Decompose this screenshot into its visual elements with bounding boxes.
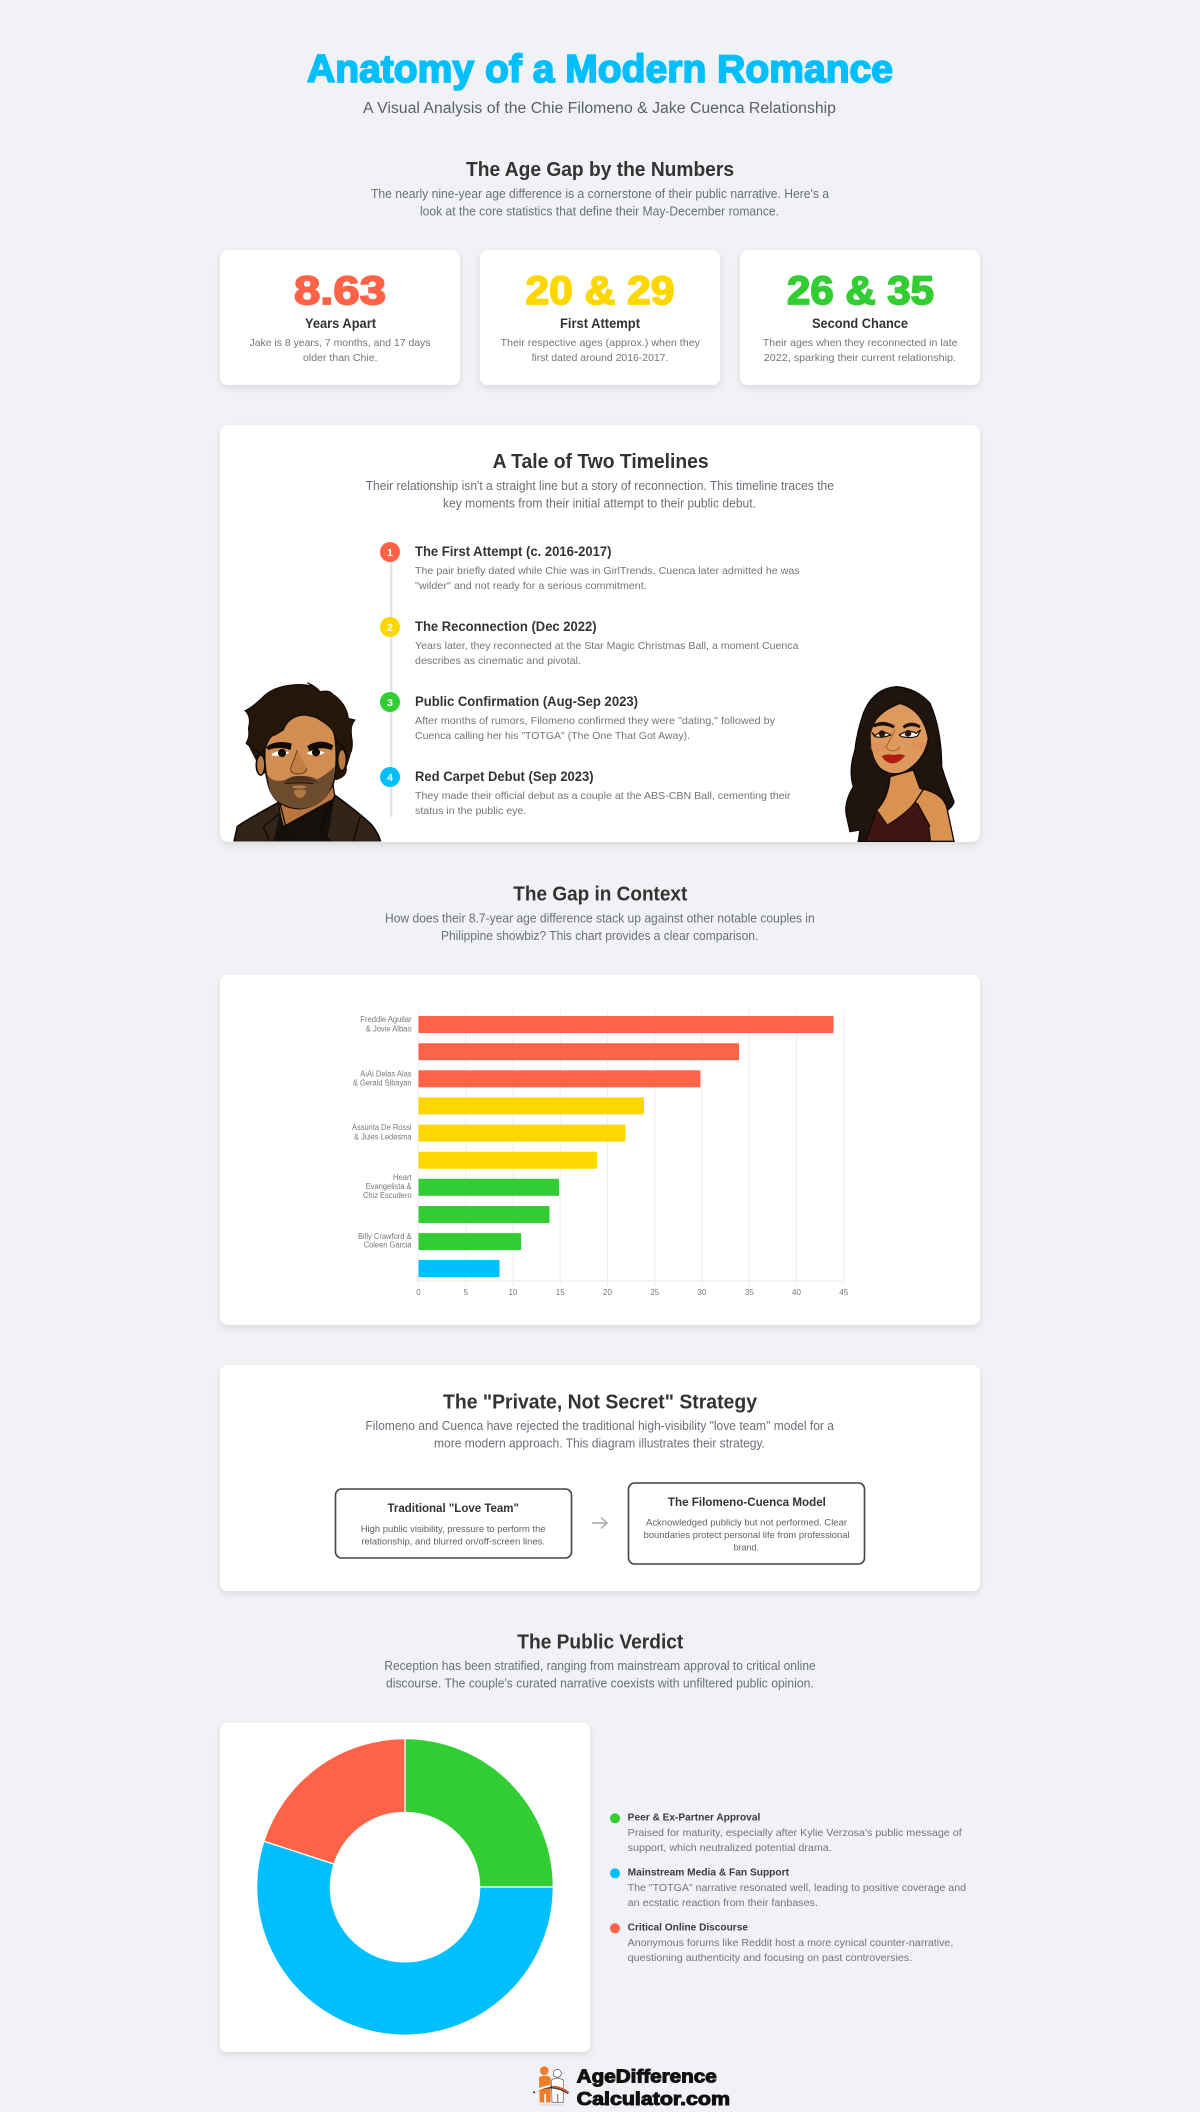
timeline item 4: 4 [387,772,393,784]
logo icon: two people [533,2066,568,2105]
timeline item 1: The First Attempt (c. 2016-2017) [415,544,612,559]
box: filomeno-cuenca model: Acknowledged publicly but not performed. Clear [646,1518,847,1529]
intro text [371,187,829,218]
stat card: years apart [220,250,460,385]
legend item: critical discourse: questioning authenticity and focusing on past controversies. [628,1952,912,1964]
y axis labels: Chiz Escudero [363,1191,412,1200]
y axis labels: Assunta De Rossi [352,1123,412,1132]
stat card: years apart: Years Apart [305,316,376,331]
legend item: critical discourse: Anonymous forums like Reddit host a more cynical counter-narrative, [628,1937,953,1949]
x axis labels: 10 [509,1288,518,1297]
section: the public verdict heading [384,1631,816,1691]
heading: The Age Gap by the Numbers [466,159,734,181]
x axis labels: 40 [792,1288,801,1297]
stat card: second chance: 2022, sparking their current relationship. [764,352,956,364]
legend item: mainstream support: an ecstatic reaction from their fanbases. [628,1897,818,1909]
legend item: mainstream support [610,1868,966,1909]
intro text [365,1419,834,1451]
timeline item 3: 3 [387,697,393,709]
y axis labels: AiAi Delas Alas [360,1069,412,1078]
y axis labels: Billy Crawford & [358,1232,412,1241]
footer logo [533,2066,730,2109]
x axis labels: 30 [698,1288,707,1297]
stat card: first attempt: First Attempt [560,316,640,331]
stat card: years apart: Jake is 8 years, 7 months, and 17 days [250,337,430,349]
x axis labels: 0 [416,1288,421,1297]
section: the gap in context heading [385,884,815,943]
intro text: Filomeno and Cuenca have rejected the traditional high-visibility "love team" model for a [365,1419,834,1433]
stat card: first attempt: Their respective ages (approx.) when they [500,337,701,349]
legend item: peer approval: support, which neutralized potential drama. [628,1842,832,1854]
stat card: years apart: older than Chie. [303,352,378,364]
header [307,48,893,117]
box: traditional love team: relationship, and blurred on/off-screen lines. [361,1536,545,1547]
timeline item 1: "wilder" and not ready for a serious commitment. [415,580,647,592]
timeline item 4: They made their official debut as a couple at the ABS-CBN Ball, cementing their [415,790,791,802]
timeline item 2: describes as cinematic and pivotal. [415,655,581,667]
timeline item 4: Red Carpet Debut (Sep 2023) [415,769,594,784]
legend item: critical discourse [610,1923,953,1964]
illustration: Chie cartoon portrait [846,687,954,841]
intro text: The nearly nine-year age difference is a cornerstone of their public narrative. Here's a [371,187,829,201]
stat card: second chance: Their ages when they reconnected in late [763,337,958,349]
intro text: look at the core statistics that define their May-December romance. [420,204,779,218]
x axis labels: 25 [650,1288,660,1297]
x axis labels: 45 [839,1288,849,1297]
box: traditional love team: High public visibility, pressure to perform the [361,1524,546,1535]
heading: The "Private, Not Secret" Strategy [443,1392,758,1414]
section: the public verdict heading: The Public Verdict [517,1631,684,1653]
timeline item 2: 2 [387,622,393,634]
stat card: first attempt [480,250,720,385]
timeline item 2: Years later, they reconnected at the Star Magic Christmas Ball, a moment Cuenca [415,640,799,652]
timeline item 2: The Reconnection (Dec 2022) [415,619,597,634]
timeline item 3 [380,692,776,742]
section: the gap in context heading: Philippine showbiz? This chart provides a clear comparison. [441,929,758,943]
logo text: AgeDifference [577,2067,717,2087]
stat card: first attempt: first dated around 2016-2017. [532,352,668,364]
x axis labels: 15 [556,1288,565,1297]
timeline item 1 [380,542,800,592]
legend item: peer approval: Praised for maturity, especially after Kylie Verzosa's public message of [628,1827,962,1839]
intro text: more modern approach. This diagram illustrates their strategy. [434,1437,765,1451]
section: the public verdict heading: discourse. The couple's curated narrative coexists with unfiltered public opinion. [386,1677,814,1691]
legend item: peer approval [610,1813,962,1854]
legend [610,1813,966,1964]
stat card: years apart: 8.63 [294,269,386,313]
panel: timeline [220,425,980,842]
legend item: critical discourse: Critical Online Discourse [628,1923,748,1934]
x axis labels: 20 [603,1288,612,1297]
section: the public verdict heading: Reception has been stratified, ranging from mainstream approval to critical online [384,1659,816,1673]
box: filomeno-cuenca model [628,1483,864,1564]
title: Anatomy of a Modern Romance [307,48,893,91]
donut slice: peer approval [405,1739,553,1887]
x axis labels: 5 [464,1288,469,1297]
arrow [592,1518,607,1528]
x axis labels [416,1288,849,1297]
timeline item 1: 1 [387,547,393,559]
stat card: first attempt: 20 & 29 [526,269,674,313]
legend item: peer approval: Peer & Ex-Partner Approval [628,1813,761,1824]
y axis labels: Coleen Garcia [364,1241,412,1250]
timeline item 4 [380,767,791,817]
intro text: Their relationship isn't a straight line but a story of reconnection. This timeline traces the [366,479,834,493]
back hair [248,740,351,780]
section: the gap in context heading: How does their 8.7-year age difference stack up against other notable couples in [385,912,815,926]
y axis labels [352,1015,412,1250]
logo text: Calculator.com [577,2089,730,2109]
logo text [577,2067,730,2109]
panel: private not secret strategy [220,1365,980,1591]
subtitle: A Visual Analysis of the Chie Filomeno & Jake Cuenca Relationship [363,100,836,117]
donut slice: mainstream support [257,1841,553,2035]
box: filomeno-cuenca model: brand. [734,1543,759,1554]
donut slice: critical discourse [264,1739,405,1864]
section: the age gap by the numbers [220,159,980,385]
y axis labels: & Jovie Albao [366,1024,412,1034]
x axis labels: 35 [745,1288,754,1297]
timeline item 4: status in the public eye. [415,805,526,817]
stat card: second chance: 26 & 35 [787,269,934,313]
section: the gap in context heading: The Gap in Context [513,884,688,906]
timeline item 3: After months of rumors, Filomeno confirmed they were "dating," followed by [415,715,776,727]
timeline item 2 [380,617,799,667]
heading: A Tale of Two Timelines [493,451,709,473]
y axis labels: & Jules Ledesma [354,1133,412,1142]
bars [418,1016,834,1277]
legend item: mainstream support: The "TOTGA" narrative resonated well, leading to positive coverage and [628,1882,966,1894]
box: filomeno-cuenca model: boundaries protect personal life from professional [644,1530,850,1541]
stat card: second chance [740,250,980,385]
stat card: second chance: Second Chance [812,316,908,331]
panel: donut chart [220,1723,590,2052]
intro text [366,479,834,511]
legend item: mainstream support: Mainstream Media & Fan Support [628,1868,790,1879]
intro text: key moments from their initial attempt to their public debut. [443,497,756,511]
illustration: Jake cartoon portrait [234,683,381,842]
y axis labels: Evangelista & [366,1182,412,1191]
timeline item 3: Public Confirmation (Aug-Sep 2023) [415,694,638,709]
y axis labels: Heart [393,1173,412,1182]
box: filomeno-cuenca model: The Filomeno-Cuenca Model [668,1497,826,1509]
box: traditional love team [336,1489,572,1558]
timeline item 3: Cuenca calling her his "TOTGA" (The One That Got Away). [415,730,690,742]
panel: horizontal bar chart of age gaps [220,975,980,1325]
y axis labels: Freddie Aguilar [360,1015,412,1024]
y axis labels: & Gerald Sibayan [353,1078,412,1087]
box: traditional love team: Traditional "Love Team" [388,1503,519,1515]
timeline item 1: The pair briefly dated while Chie was in GirlTrends. Cuenca later admitted he was [415,565,800,577]
